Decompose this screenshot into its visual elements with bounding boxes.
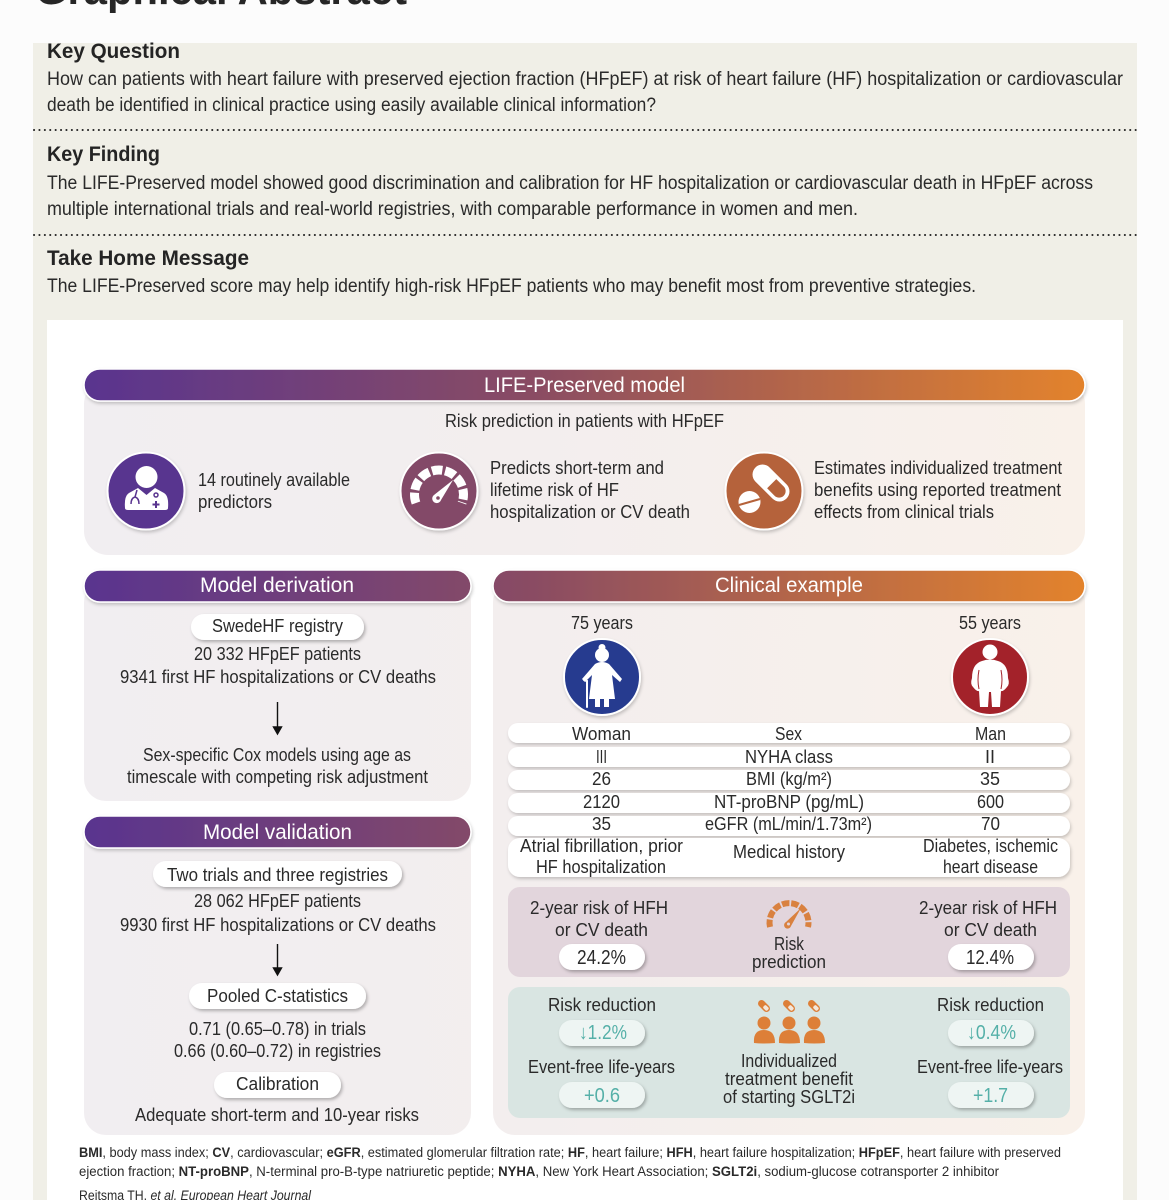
row: NT-proBNP: NT-proBNP (pg/mL) bbox=[714, 792, 864, 812]
text: predictors bbox=[198, 470, 350, 512]
row: BMI: 26 bbox=[592, 769, 611, 789]
text: risk prediction bbox=[490, 458, 690, 522]
panel: take home message bbox=[47, 247, 976, 297]
heading: key finding: Key Finding bbox=[47, 143, 160, 166]
text: woman 2-year risk label: 2-year risk of HFH bbox=[530, 898, 668, 918]
header: model derivation: Model derivation bbox=[200, 574, 354, 597]
pill: 24.2% bbox=[559, 944, 645, 970]
row: eGFR: 70 bbox=[981, 814, 1000, 834]
text: Cox models: timescale with competing risk adjustment bbox=[127, 767, 428, 787]
text: key question body bbox=[47, 69, 1124, 116]
panel: model derivation bbox=[84, 570, 471, 801]
pill: down 1.2% bbox=[559, 1020, 645, 1046]
pill: 12.4%: 12.4% bbox=[966, 947, 1014, 969]
text: individualized treatment benefit: Individualized bbox=[741, 1051, 837, 1071]
row: sex: Woman bbox=[572, 724, 631, 744]
row: NYHA class: III bbox=[596, 747, 607, 767]
pill: calibration: Calibration bbox=[236, 1074, 319, 1094]
text: treatment benefits: Estimates individualized treatment bbox=[814, 458, 1062, 478]
panel: risk prediction bbox=[508, 887, 1070, 977]
text: man 2-year risk label bbox=[919, 898, 1057, 940]
icon: pills bbox=[726, 452, 802, 530]
text: treatment benefits: effects from clinical trials bbox=[814, 502, 994, 522]
row: BMI bbox=[508, 769, 1070, 790]
text: risk prediction label: Risk bbox=[774, 934, 805, 954]
text: predictors: predictors bbox=[198, 492, 272, 512]
row: medical history bbox=[508, 836, 1070, 877]
text: treatment benefits bbox=[814, 458, 1062, 522]
icon: elderly woman bbox=[564, 639, 640, 715]
row: sex: Man bbox=[975, 724, 1006, 744]
icon: gauge bbox=[400, 452, 478, 530]
pill: calibration bbox=[214, 1072, 341, 1098]
text: man 2-year risk label: or CV death bbox=[944, 920, 1037, 940]
text: predictors: 14 routinely available bbox=[198, 470, 350, 490]
text: key finding body: multiple international trials and real-world registries, with comparable performance in women and men. bbox=[47, 199, 858, 220]
icon: doctor bbox=[108, 452, 184, 530]
header: model validation bbox=[84, 816, 471, 848]
text: key finding body bbox=[47, 173, 1093, 220]
pill: 12.4% bbox=[948, 944, 1034, 970]
pill: down 1.2%: ↓1.2% bbox=[579, 1022, 627, 1044]
text: C-statistics values: 0.66 (0.60–0.72) in registries bbox=[174, 1041, 381, 1061]
panel: white figure area bbox=[47, 320, 1123, 1200]
pill: +1.7 bbox=[948, 1082, 1034, 1108]
row: NT-proBNP: 600 bbox=[977, 792, 1004, 812]
row: NYHA class: NYHA class bbox=[745, 747, 833, 767]
panel: clinical example bbox=[493, 570, 1085, 1135]
panel: treatment benefit bbox=[508, 987, 1070, 1118]
text: calibration result: Adequate short-term and 10-year risks bbox=[135, 1105, 419, 1125]
panel: model validation bbox=[84, 816, 471, 1135]
panel: key question bbox=[47, 40, 1124, 116]
text: derivation cohort: 20 332 HFpEF patients bbox=[194, 644, 361, 664]
row: medical history: heart disease bbox=[943, 857, 1038, 877]
row: NT-proBNP: 2120 bbox=[583, 792, 620, 812]
row: BMI: BMI (kg/m²) bbox=[746, 769, 832, 789]
text: derivation cohort: 9341 first HF hospitalizations or CV deaths bbox=[120, 667, 436, 687]
arrow: derivation bbox=[274, 702, 282, 734]
pill: SwedeHF registry bbox=[191, 614, 364, 640]
row: NYHA class: II bbox=[985, 747, 995, 767]
text: treatment benefits: benefits using reported treatment bbox=[814, 480, 1061, 500]
text: risk prediction: hospitalization or CV death bbox=[490, 502, 690, 522]
text: validation cohort bbox=[120, 891, 436, 935]
text: Cox models bbox=[127, 745, 428, 787]
row: BMI: 35 bbox=[980, 769, 1000, 789]
heading: key question: Key Question bbox=[47, 40, 180, 63]
row: eGFR bbox=[508, 814, 1070, 836]
text: validation cohort: 9930 first HF hospitalizations or CV deaths bbox=[120, 915, 436, 935]
table: patient characteristics bbox=[508, 723, 1070, 877]
pill: +1.7: +1.7 bbox=[973, 1085, 1008, 1107]
text: derivation cohort bbox=[120, 644, 436, 687]
pill: +0.6: +0.6 bbox=[584, 1085, 620, 1107]
pill: SwedeHF registry: SwedeHF registry bbox=[212, 616, 343, 636]
panel: LIFE-Preserved model bbox=[84, 369, 1085, 555]
text: validation cohort: 28 062 HFpEF patients bbox=[194, 891, 361, 911]
row: NYHA class bbox=[508, 747, 1070, 767]
text: C-statistics values bbox=[174, 1019, 381, 1061]
header: clinical example bbox=[493, 570, 1085, 602]
footnote: abbreviations: ejection fraction; NT-proBNP, N-terminal pro-B-type natriuretic peptide; NYHA, New York Heart Association; SGLT2i, sodium-glucose cotransporter 2 inhibitor bbox=[79, 1164, 999, 1179]
label: man event-free life-years: Event-free life-years bbox=[917, 1057, 1063, 1077]
text: risk prediction: lifetime risk of HF bbox=[490, 480, 619, 500]
header: model validation: Model validation bbox=[203, 821, 352, 844]
pill: down 0.4% bbox=[948, 1020, 1034, 1046]
label: woman event-free life-years: Event-free life-years bbox=[528, 1057, 675, 1077]
text: woman 2-year risk label bbox=[530, 898, 668, 940]
text: individualized treatment benefit: of starting SGLT2i bbox=[723, 1087, 855, 1107]
text: individualized treatment benefit: treatment benefit bbox=[725, 1069, 853, 1089]
row: medical history: HF hospitalization bbox=[536, 857, 666, 877]
text: man 2-year risk label: 2-year risk of HFH bbox=[919, 898, 1057, 918]
heading: take home message: Take Home Message bbox=[47, 247, 249, 270]
text: key question body: death be identified in clinical practice using easily available clinical information? bbox=[47, 95, 656, 116]
footnote: abbreviations: BMI, body mass index; CV, cardiovascular; eGFR, estimated glomerular filtration rate; HF, heart failure; HFH, heart failure hospitalization; HFpEF, heart failure with preserved bbox=[79, 1145, 1061, 1160]
text: key question body: How can patients with heart failure with preserved ejection fraction (HFpEF) at risk of heart failure (HF) hospitalization or cardiovascular bbox=[47, 69, 1124, 90]
row: sex bbox=[508, 723, 1070, 744]
pill: two trials and three registries: Two trials and three registries bbox=[167, 865, 388, 885]
header: LIFE-Preserved model: LIFE-Preserved model bbox=[484, 374, 685, 397]
header: clinical example: Clinical example bbox=[715, 574, 863, 597]
pill: 24.2%: 24.2% bbox=[577, 947, 626, 969]
text: key finding body: The LIFE-Preserved model showed good discrimination and calibration for HF hospitalization or cardiovascular death in HFpEF across bbox=[47, 173, 1093, 194]
label: woman risk reduction: Risk reduction bbox=[548, 995, 656, 1015]
icon: orange gauge bbox=[770, 903, 808, 929]
pill: +0.6 bbox=[559, 1082, 645, 1108]
row: medical history: Atrial fibrillation, prior bbox=[520, 836, 683, 856]
icon: three patients with capsules bbox=[754, 999, 825, 1044]
header: model derivation bbox=[84, 570, 471, 602]
text: risk prediction label: prediction bbox=[752, 952, 826, 972]
text: risk prediction: Predicts short-term and bbox=[490, 458, 664, 478]
row: NT-proBNP bbox=[508, 792, 1070, 813]
row: sex: Sex bbox=[775, 724, 802, 744]
label: man risk reduction: Risk reduction bbox=[937, 995, 1044, 1015]
subtitle: Risk prediction in patients with HFpEF bbox=[445, 411, 724, 431]
label: 75 years: 75 years bbox=[571, 613, 633, 633]
header: LIFE-Preserved model bbox=[84, 369, 1085, 401]
text: risk prediction label bbox=[752, 934, 826, 972]
row: medical history: Diabetes, ischemic bbox=[923, 836, 1058, 856]
text: individualized treatment benefit bbox=[723, 1051, 855, 1107]
text: Cox models: Sex-specific Cox models using age as bbox=[143, 745, 411, 765]
text: woman 2-year risk label: or CV death bbox=[555, 920, 648, 940]
text: C-statistics values: 0.71 (0.65–0.78) in trials bbox=[189, 1019, 366, 1039]
pill: down 0.4%: ↓0.4% bbox=[967, 1022, 1016, 1044]
row: medical history: Medical history bbox=[733, 842, 845, 862]
icon: obese man bbox=[952, 639, 1028, 715]
panel: key finding bbox=[47, 143, 1093, 220]
pill: pooled C-statistics: Pooled C-statistics bbox=[207, 986, 348, 1006]
text: take home message body: The LIFE-Preserved score may help identify high-risk HFpEF patients who may benefit most from preventive strategies. bbox=[47, 276, 976, 297]
footnote: abbreviations bbox=[79, 1145, 1061, 1179]
label: 55 years: 55 years bbox=[959, 613, 1021, 633]
row: eGFR: eGFR (mL/min/1.73m²) bbox=[705, 814, 872, 834]
arrow: validation bbox=[274, 944, 282, 975]
row: eGFR: 35 bbox=[592, 814, 611, 834]
pill: pooled C-statistics bbox=[189, 983, 366, 1009]
